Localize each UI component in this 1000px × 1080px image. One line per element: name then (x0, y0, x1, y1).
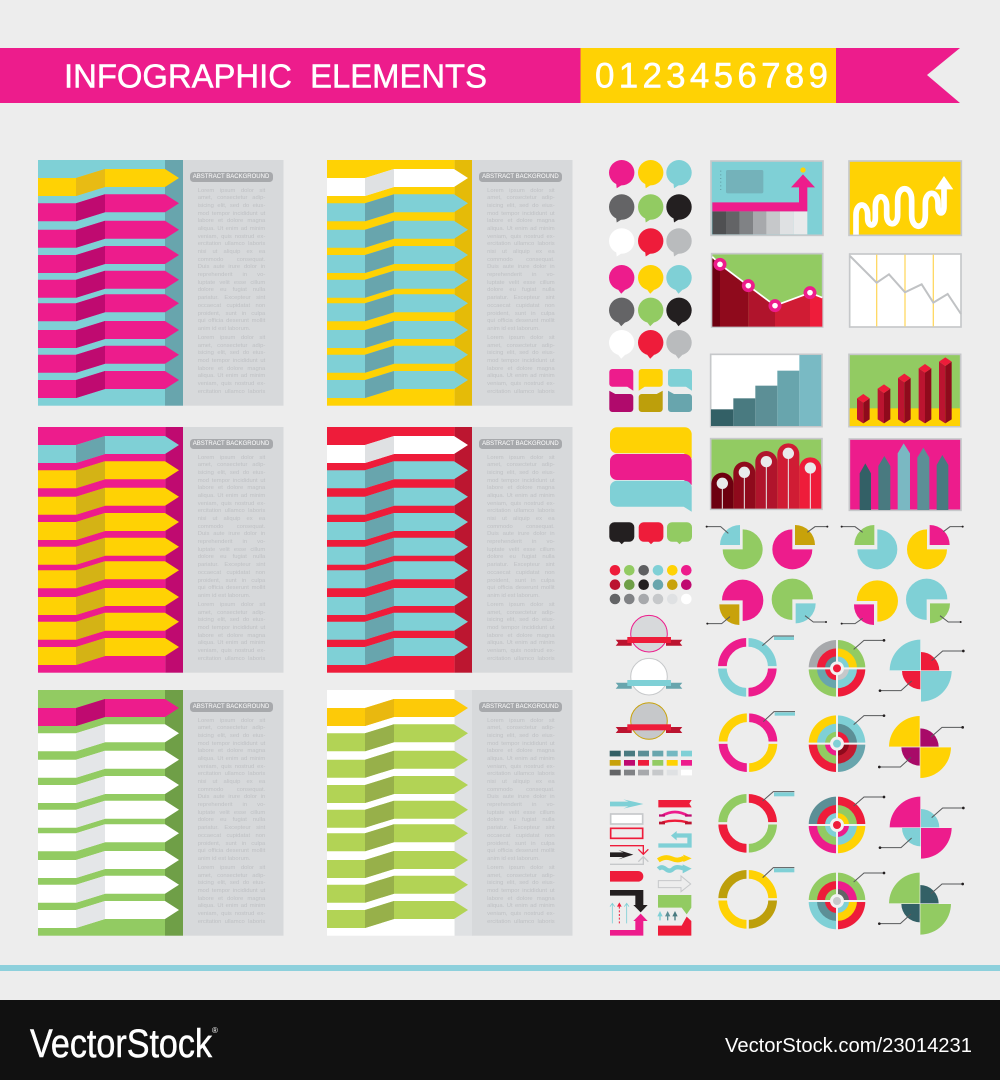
large stacked speech bubbles (610, 427, 692, 512)
colour swatches (610, 751, 692, 775)
panel: yellow arrows on pink: isicing elit, sed do eius- (198, 470, 265, 476)
panel: lime arrows on white: mod tempor incididunt ut (487, 741, 555, 747)
panel: cyan arrows on red: Duis aute irure dolor in (487, 531, 555, 537)
paired notched tiles (609, 369, 692, 412)
panel: cyan arrows on red: aliqua. Ut enim ad minim (487, 640, 555, 646)
arrows and shapes: left column (610, 799, 648, 936)
panel: white arrows on green: veniam, quis nostrud ex- (198, 911, 265, 917)
panel: white arrows on green: qui officia deserunt mollit (198, 848, 265, 854)
bottom cyan rule (0, 965, 1000, 971)
panel: pink arrows on cyan: occaecat cupidatat non (198, 303, 265, 309)
pinwheel chart 4 (878, 873, 964, 935)
panel: yellow arrows on pink: aliqua. Ut enim ad minim (198, 493, 265, 499)
panel: yellow arrows on pink: Lorem ipsum dolor sit (198, 602, 265, 608)
panel: lime arrows on white: nisi ut aliquip ex ea (487, 779, 555, 785)
panel: cyan arrows on yellow: ercitation ullamco laboris (487, 389, 555, 395)
panel: pink arrows on cyan: amet, consectetur adip- (198, 343, 265, 349)
panel: cyan arrows on yellow: ABSTRACT BACKGROUND (482, 174, 559, 180)
panel: white arrows on green: pariatur. Excepteur sint (198, 825, 265, 831)
panel: cyan arrows on red: labore et dolore magna (487, 633, 555, 639)
panel: cyan arrows on yellow: commodo consequat. (487, 257, 555, 263)
panel: cyan arrows on red: anim id est laborum. (487, 593, 540, 599)
panel: white arrows on green: labore et dolore magna (198, 896, 265, 902)
ring chart: green and red (716, 792, 794, 855)
panel: lime arrows on white: reprehenderit in vo- (487, 802, 555, 808)
panel: cyan arrows on red: veniam, quis nostrud ex- (487, 648, 555, 654)
panel: yellow arrows on pink: pariatur. Excepteur sint (198, 562, 265, 568)
panel: yellow arrows on pink: proident, sunt in culpa (198, 578, 265, 584)
chart: 3D red bars (849, 354, 961, 427)
panel: cyan arrows on red: labore et dolore magna (487, 485, 555, 491)
panel: yellow arrows on pink: veniam, quis nostrud ex- (198, 648, 265, 654)
panel: yellow arrows on pink: mod tempor incididunt ut (198, 478, 265, 484)
panel: cyan arrows on red: mod tempor incididunt ut (487, 625, 555, 631)
panel: cyan arrows on red: amet, consectetur adip- (487, 462, 555, 468)
panel: cyan arrows on red: aliqua. Ut enim ad minim (487, 493, 555, 499)
speech bubbles set 2 (609, 265, 692, 359)
panel: cyan arrows on red: pariatur. Excepteur sint (487, 562, 555, 568)
panel: white arrows on green: Lorem ipsum dolor sit (198, 718, 265, 724)
panel: white arrows on green: isicing elit, sed do eius- (198, 733, 265, 739)
panel: cyan arrows on yellow: anim id est laborum. (487, 326, 540, 332)
panel: lime arrows on white: proident, sunt in culpa (487, 840, 555, 846)
panel: pink arrows on cyan: Duis aute irure dolor in (198, 264, 265, 270)
pinwheel chart 3 (879, 797, 965, 859)
chart: grey line on white (850, 254, 961, 327)
panel: yellow arrows on pink: ABSTRACT BACKGROUND (193, 441, 269, 447)
panel: white arrows on green: mod tempor incididunt ut (198, 888, 265, 894)
panel: yellow arrows on pink (38, 427, 284, 673)
panel: cyan arrows on yellow: amet, consectetur adip- (487, 195, 555, 201)
panel: pink arrows on cyan (38, 160, 284, 406)
panel: pink arrows on cyan: ercitation ullamco laboris (198, 241, 265, 247)
panel: cyan arrows on red: mod tempor incididunt ut (487, 478, 555, 484)
panel: yellow arrows on pink: luptate velit esse cillum (198, 547, 265, 553)
panel: cyan arrows on yellow: isicing elit, sed do eius- (487, 350, 555, 356)
panel: yellow arrows on pink: amet, consectetur adip- (198, 462, 265, 468)
panel: lime arrows on white: isicing elit, sed do eius- (487, 733, 555, 739)
panel: cyan arrows on yellow: luptate velit esse cillum (487, 280, 555, 286)
panel: lime arrows on white: veniam, quis nostrud ex- (487, 911, 555, 917)
panel: lime arrows on white: Lorem ipsum dolor sit (487, 718, 555, 724)
panel: cyan arrows on red: ercitation ullamco laboris (487, 656, 555, 662)
panel: cyan arrows on yellow: nisi ut aliquip ex ea (487, 249, 555, 255)
panel: pink arrows on cyan: isicing elit, sed do eius- (198, 203, 265, 209)
panel: pink arrows on cyan: aliqua. Ut enim ad minim (198, 373, 265, 379)
panel: cyan arrows on yellow: labore et dolore magna (487, 218, 555, 224)
panel: white arrows on green: reprehenderit in vo- (198, 802, 265, 808)
panel: cyan arrows on red: ABSTRACT BACKGROUND (482, 441, 559, 447)
panel: lime arrows on white: qui officia deserunt mollit (487, 848, 555, 854)
panel: white arrows on green: occaecat cupidatat non (198, 833, 265, 839)
panel: yellow arrows on pink: commodo consequat. (198, 524, 265, 530)
target chart 4 (808, 872, 885, 930)
panel: pink arrows on cyan: mod tempor incididunt ut (198, 358, 265, 364)
panel: cyan arrows on yellow: ercitation ullamco laboris (487, 241, 555, 247)
panel: cyan arrows on yellow: labore et dolore magna (487, 366, 555, 372)
pie chart pairs: bottom row (706, 579, 962, 625)
panel: cyan arrows on yellow: veniam, quis nostrud ex- (487, 381, 555, 387)
panel: lime arrows on white: pariatur. Excepteur sint (487, 825, 555, 831)
panel: cyan arrows on red: commodo consequat. (487, 524, 555, 530)
panel: yellow arrows on pink: Lorem ipsum dolor sit (198, 454, 265, 460)
panel: yellow arrows on pink: occaecat cupidatat non (198, 570, 265, 576)
panel: pink arrows on cyan: amet, consectetur adip- (198, 195, 265, 201)
panel: lime arrows on white: ABSTRACT BACKGROUND (482, 704, 559, 710)
panel: lime arrows on white: Duis aute irure dolor in (487, 794, 555, 800)
footer bar: VectorStock (30, 1022, 213, 1066)
panel: pink arrows on cyan: veniam, quis nostrud ex- (198, 381, 265, 387)
small square speech bubbles (609, 522, 692, 544)
panel: white arrows on green: amet, consectetur adip- (198, 725, 265, 731)
panel: lime arrows on white: ercitation ullamco laboris (487, 771, 555, 777)
pinwheel chart 2 (878, 716, 964, 778)
panel: white arrows on green: nisi ut aliquip ex ea (198, 779, 265, 785)
chart: red area on green (712, 254, 823, 327)
panel: pink arrows on cyan: proident, sunt in culpa (198, 310, 265, 316)
panel: lime arrows on white: dolore eu fugiat nulla (487, 817, 555, 823)
panel: pink arrows on cyan: Lorem ipsum dolor sit (198, 335, 265, 341)
arrows and shapes: right column (657, 800, 692, 936)
panel: white arrows on green: isicing elit, sed do eius- (198, 880, 265, 886)
panel: lime arrows on white: ercitation ullamco laboris (487, 919, 555, 925)
panel: yellow arrows on pink: Duis aute irure dolor in (198, 531, 265, 537)
pinwheel chart 1 (879, 640, 965, 702)
panel: lime arrows on white: aliqua. Ut enim ad minim (487, 756, 555, 762)
panel: white arrows on green: ercitation ullamco laboris (198, 919, 265, 925)
panel: lime arrows on white: aliqua. Ut enim ad minim (487, 903, 555, 909)
panel: white arrows on green: labore et dolore magna (198, 748, 265, 754)
panel: yellow arrows on pink: reprehenderit in vo- (198, 539, 265, 545)
speech bubbles set 1 (609, 160, 692, 256)
panel: cyan arrows on red: Lorem ipsum dolor sit (487, 602, 555, 608)
panel: lime arrows on white (327, 690, 572, 936)
panel: yellow arrows on pink: isicing elit, sed do eius- (198, 617, 265, 623)
ribbon badge cyan (616, 658, 682, 695)
panel: pink arrows on cyan: aliqua. Ut enim ad minim (198, 226, 265, 232)
chart: rounded red columns with pins (711, 439, 822, 509)
panel: white arrows on green: amet, consectetur adip- (198, 873, 265, 879)
panel: cyan arrows on red: amet, consectetur adip- (487, 610, 555, 616)
panel: pink arrows on cyan: anim id est laborum. (198, 326, 250, 332)
panel: yellow arrows on pink: labore et dolore magna (198, 485, 265, 491)
panel: cyan arrows on yellow: Lorem ipsum dolor sit (487, 188, 555, 194)
footer bar (0, 1000, 1000, 1080)
panel: pink arrows on cyan: qui officia deserunt mollit (198, 318, 265, 324)
panel: pink arrows on cyan: luptate velit esse cillum (198, 280, 265, 286)
ring chart: pink and cyan (716, 636, 794, 699)
panel: cyan arrows on yellow: reprehenderit in vo- (487, 272, 555, 278)
chart: growth arrow on cyan (711, 161, 823, 235)
charts group (711, 161, 961, 510)
panel: cyan arrows on red: luptate velit esse cillum (487, 547, 555, 553)
panel: white arrows on green: aliqua. Ut enim ad minim (198, 903, 265, 909)
panel: lime arrows on white: isicing elit, sed do eius- (487, 880, 555, 886)
panel: lime arrows on white: luptate velit esse cillum (487, 810, 555, 816)
panel: cyan arrows on red: Lorem ipsum dolor sit (487, 454, 555, 460)
panel: pink arrows on cyan: veniam, quis nostrud ex- (198, 234, 265, 240)
panel: white arrows on green: ercitation ullamco laboris (198, 771, 265, 777)
title banner: 0123456789 (595, 56, 828, 96)
panel: lime arrows on white: amet, consectetur adip- (487, 725, 555, 731)
title banner: INFOGRAPHIC ELEMENTS (64, 58, 487, 96)
panel: cyan arrows on yellow: isicing elit, sed do eius- (487, 203, 555, 209)
panel: lime arrows on white: occaecat cupidatat non (487, 833, 555, 839)
ribbon badge red (616, 615, 682, 652)
panel: white arrows on green: ABSTRACT BACKGROUND (193, 704, 269, 710)
panel: pink arrows on cyan: nisi ut aliquip ex ea (198, 249, 265, 255)
panel: lime arrows on white: commodo consequat. (487, 787, 555, 793)
panel: cyan arrows on red: isicing elit, sed do eius- (487, 617, 555, 623)
panel: lime arrows on white: labore et dolore magna (487, 896, 555, 902)
panel: white arrows on green: proident, sunt in culpa (198, 840, 265, 846)
panel: cyan arrows on yellow: dolore eu fugiat nulla (487, 287, 555, 293)
panel: cyan arrows on red: occaecat cupidatat non (487, 570, 555, 576)
pies, rings, targets and pinwheels (706, 525, 965, 935)
panel: white arrows on green: Lorem ipsum dolor sit (198, 865, 265, 871)
panel: yellow arrows on pink: mod tempor incididunt ut (198, 625, 265, 631)
panel: cyan arrows on red: qui officia deserunt mollit (487, 585, 555, 591)
panel: lime arrows on white: veniam, quis nostrud ex- (487, 764, 555, 770)
panel: pink arrows on cyan: commodo consequat. (198, 257, 265, 263)
panel: pink arrows on cyan: mod tempor incididunt ut (198, 211, 265, 217)
panel: cyan arrows on red: dolore eu fugiat nulla (487, 554, 555, 560)
target chart 2 (808, 714, 885, 772)
panel: pink arrows on cyan: isicing elit, sed do eius- (198, 350, 265, 356)
panel: lime arrows on white: anim id est laborum. (487, 856, 540, 862)
panel: white arrows on green: Duis aute irure dolor in (198, 794, 265, 800)
chart: white snake arrow on yellow (849, 161, 961, 235)
panel: yellow arrows on pink: veniam, quis nostrud ex- (198, 501, 265, 507)
panel: cyan arrows on yellow: qui officia deserunt mollit (487, 318, 555, 324)
panel: cyan arrows on yellow: mod tempor incididunt ut (487, 211, 555, 217)
panel: yellow arrows on pink: dolore eu fugiat nulla (198, 554, 265, 560)
panel: yellow arrows on pink: aliqua. Ut enim ad minim (198, 640, 265, 646)
panel: white arrows on green: aliqua. Ut enim ad minim (198, 756, 265, 762)
panel: white arrows on green: anim id est laborum. (198, 856, 250, 862)
panel: lime arrows on white: Lorem ipsum dolor sit (487, 865, 555, 871)
ring chart: gold and yellow (716, 868, 794, 931)
panel: cyan arrows on yellow (327, 160, 572, 406)
panel: cyan arrows on red: reprehenderit in vo- (487, 539, 555, 545)
panel: cyan arrows on yellow: Duis aute irure dolor in (487, 264, 555, 270)
panel: cyan arrows on yellow: aliqua. Ut enim ad minim (487, 373, 555, 379)
panel: pink arrows on cyan: Lorem ipsum dolor sit (198, 188, 265, 194)
panel: white arrows on green (38, 690, 284, 936)
target chart 3 (808, 796, 885, 854)
chart: teal staircase (711, 354, 822, 427)
panel: yellow arrows on pink: labore et dolore magna (198, 633, 265, 639)
panel: white arrows on green: commodo consequat. (198, 787, 265, 793)
panel: yellow arrows on pink: ercitation ullamco laboris (198, 508, 265, 514)
footer bar: VectorStock.com/23014231 (725, 1035, 972, 1057)
panel: cyan arrows on yellow: veniam, quis nostrud ex- (487, 234, 555, 240)
panel: pink arrows on cyan: labore et dolore magna (198, 218, 265, 224)
panel: pink arrows on cyan: reprehenderit in vo- (198, 272, 265, 278)
panel: white arrows on green: dolore eu fugiat nulla (198, 817, 265, 823)
panel: cyan arrows on yellow: amet, consectetur adip- (487, 343, 555, 349)
panel: cyan arrows on yellow: aliqua. Ut enim ad minim (487, 226, 555, 232)
panel: cyan arrows on red: isicing elit, sed do eius- (487, 470, 555, 476)
panel: pink arrows on cyan: ercitation ullamco laboris (198, 389, 265, 395)
target chart 1 (808, 639, 885, 697)
panel: cyan arrows on yellow: mod tempor incididunt ut (487, 358, 555, 364)
panel: pink arrows on cyan: pariatur. Excepteur sint (198, 295, 265, 301)
panel: white arrows on green: mod tempor incididunt ut (198, 741, 265, 747)
panel: white arrows on green: luptate velit esse cillum (198, 810, 265, 816)
panel: cyan arrows on yellow: occaecat cupidatat non (487, 303, 555, 309)
colour dots (610, 565, 692, 604)
panel: cyan arrows on red: proident, sunt in culpa (487, 578, 555, 584)
panel: lime arrows on white: labore et dolore magna (487, 748, 555, 754)
panel: yellow arrows on pink: anim id est laborum. (198, 593, 250, 599)
ring chart: yellow and pink (716, 711, 795, 774)
panel: yellow arrows on pink: nisi ut aliquip ex ea (198, 516, 265, 522)
footer bar: ® (212, 1026, 218, 1035)
panel: cyan arrows on yellow: pariatur. Excepteur sint (487, 295, 555, 301)
ribbon badge gold (616, 703, 682, 739)
panel: cyan arrows on yellow: Lorem ipsum dolor sit (487, 335, 555, 341)
panel: yellow arrows on pink: amet, consectetur adip- (198, 610, 265, 616)
panel: cyan arrows on yellow: proident, sunt in culpa (487, 310, 555, 316)
panel: yellow arrows on pink: ercitation ullamco laboris (198, 656, 265, 662)
panel: pink arrows on cyan: labore et dolore magna (198, 366, 265, 372)
panel: white arrows on green: veniam, quis nostrud ex- (198, 764, 265, 770)
panel: pink arrows on cyan: ABSTRACT BACKGROUND (193, 174, 269, 180)
panel: lime arrows on white: mod tempor incididunt ut (487, 888, 555, 894)
panel: cyan arrows on red (327, 427, 572, 673)
panel: pink arrows on cyan: dolore eu fugiat nulla (198, 287, 265, 293)
panel: lime arrows on white: amet, consectetur adip- (487, 873, 555, 879)
chart: teal arrows on pink (849, 439, 961, 510)
panel: cyan arrows on red: nisi ut aliquip ex ea (487, 516, 555, 522)
pie chart pairs: top row (706, 525, 964, 569)
panel: yellow arrows on pink: qui officia deserunt mollit (198, 585, 265, 591)
panel: cyan arrows on red: veniam, quis nostrud ex- (487, 501, 555, 507)
title banner (0, 48, 960, 103)
panel: cyan arrows on red: ercitation ullamco laboris (487, 508, 555, 514)
